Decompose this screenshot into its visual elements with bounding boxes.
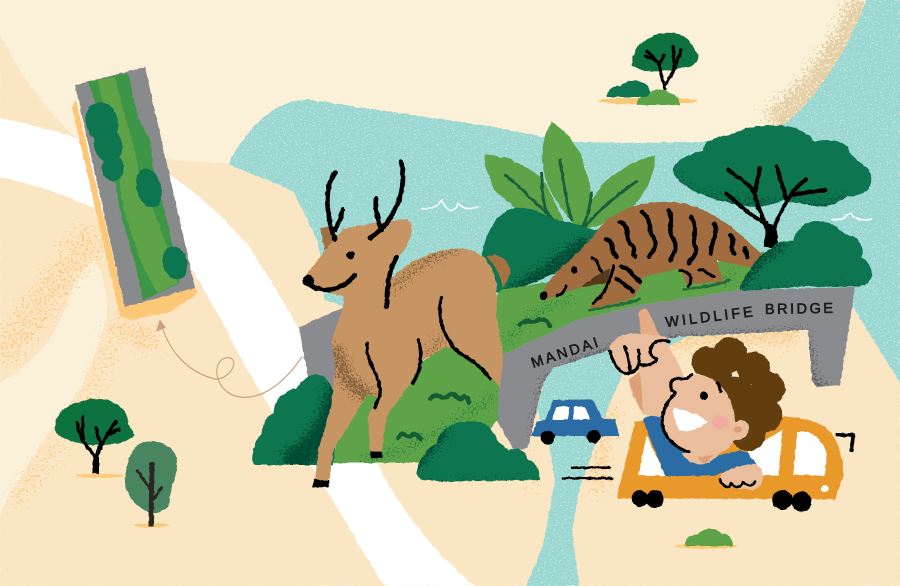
boy face: [664, 375, 737, 454]
panel: river and sea: [220, 0, 900, 586]
centre leaf: [542, 122, 591, 232]
canopy: [55, 399, 135, 445]
tree shadow: [76, 474, 124, 478]
bus lamp: [821, 485, 829, 492]
belly speckle: [582, 268, 610, 287]
shadow: [675, 543, 737, 549]
panel: light land wedge: [0, 261, 107, 514]
panel: aerial view of the bridge: [72, 67, 198, 320]
boy raised arm: [628, 343, 685, 417]
trunk: [727, 167, 825, 248]
label: MANDAI: MANDAI: [529, 334, 603, 372]
canopy shading: [673, 160, 850, 205]
bush: front of bridge: [416, 421, 540, 482]
left leaf: [484, 155, 567, 227]
canopy: [673, 125, 871, 207]
bush shading: [285, 385, 340, 465]
boy hand: [610, 333, 667, 375]
orange bus with boy: [610, 309, 853, 512]
pangolin body: [542, 202, 763, 308]
canopy: [125, 441, 177, 513]
car windows: [552, 407, 591, 420]
boy face outline: [662, 375, 692, 452]
bridge deck: [497, 287, 855, 452]
bush shading: [416, 428, 530, 482]
bush: right on bridge: [735, 221, 872, 291]
curled arrow to aerial view: [157, 321, 302, 397]
boy cheek: [712, 416, 728, 428]
tree: round left: [55, 399, 135, 478]
tree: tall left: [125, 441, 177, 527]
boy resting hand: [720, 463, 763, 490]
boy hair: [692, 337, 785, 451]
bus wheels: [632, 490, 648, 507]
wave marks: [422, 200, 871, 220]
right leaf: [577, 155, 655, 230]
boy neck: [682, 450, 722, 464]
tree: top island: [598, 33, 698, 105]
boy ear: [733, 421, 749, 440]
bridge sign text: [529, 301, 836, 372]
label: WILDLIFE: WILDLIFE: [665, 304, 757, 331]
trunk: [137, 462, 162, 526]
big tree on the bridge: [673, 125, 871, 248]
thumbnail green strip: [88, 73, 180, 300]
deer: [303, 162, 511, 487]
bus windows: [638, 435, 665, 476]
pangolin: [540, 202, 763, 310]
thumbnail tree blobs: [81, 99, 191, 283]
feet shadows: [589, 280, 729, 310]
deer body: [303, 219, 503, 480]
trunk: [77, 417, 119, 474]
pangolin scale bands: [606, 210, 747, 292]
thumbnail shadow: [72, 100, 198, 320]
small bush bottom: [675, 528, 737, 549]
bus body: [617, 417, 843, 499]
deer lines: [303, 162, 490, 487]
green hill: [333, 250, 775, 463]
bush shading: [510, 240, 590, 295]
pangolin face and leg lines: [557, 258, 714, 303]
leaf veins: [505, 160, 637, 228]
thumbnail light green strip: [97, 77, 178, 293]
bush light: [637, 89, 680, 105]
car body: [531, 399, 619, 436]
blue car: [531, 399, 619, 478]
boy pointing finger: [638, 309, 660, 337]
bridge back section: [299, 308, 400, 420]
road: [0, 118, 475, 586]
boy mouth: [673, 408, 708, 431]
bush dark: [607, 81, 652, 97]
boy shirt: [643, 412, 757, 476]
motion lines: [563, 468, 612, 478]
dark bush behind pangolin: [480, 207, 600, 295]
label: BRIDGE: BRIDGE: [765, 301, 836, 318]
bush shading: [735, 240, 870, 291]
boy eye and brow: [700, 392, 708, 400]
trunk: [645, 47, 681, 89]
canopy: [632, 33, 698, 71]
bush: left of deer: [252, 375, 340, 465]
deer fur shading: [335, 248, 460, 396]
island shadow: [598, 98, 698, 104]
grass tufts: [398, 319, 550, 439]
bridge front: [497, 287, 855, 452]
foliage: [686, 528, 733, 546]
deer ear and tail: [303, 219, 511, 480]
car wheels: [541, 431, 555, 445]
tropical leaves: [484, 122, 655, 232]
bus mirror: [837, 435, 853, 451]
bridge shading: [535, 333, 830, 440]
tree shadow: [133, 523, 169, 527]
hill shading: [360, 275, 740, 462]
thumbnail grey deck: [75, 67, 195, 307]
